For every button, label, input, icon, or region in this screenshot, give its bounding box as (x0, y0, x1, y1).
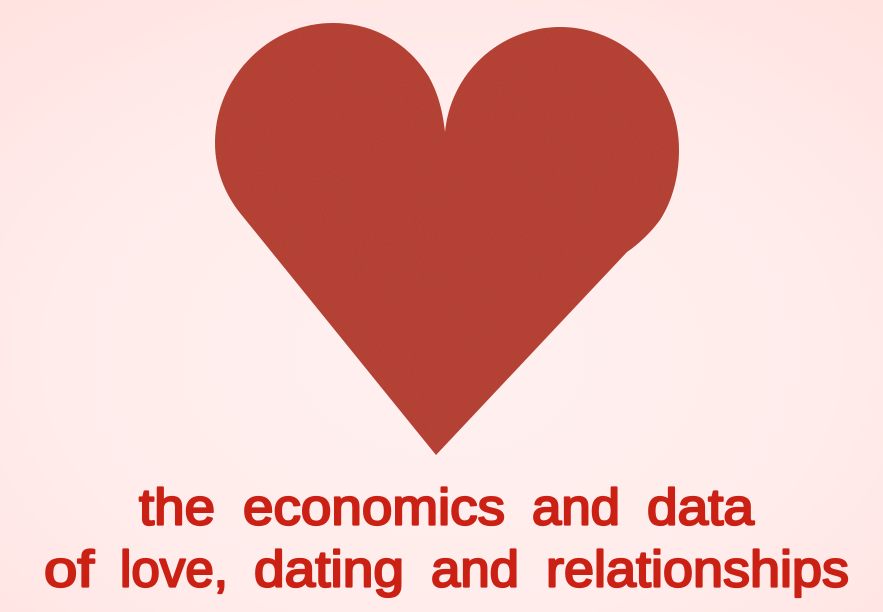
title line 2: of (44, 540, 95, 598)
title line 1: data (647, 478, 755, 536)
title line 1: the (139, 478, 215, 536)
icon: red paper heart (215, 23, 679, 455)
title line 1: and (532, 478, 620, 536)
title line 2: love, (120, 540, 228, 598)
title (44, 478, 849, 598)
title line 2: and (431, 540, 519, 598)
title line 2: relationships (546, 540, 849, 598)
title line 1: economics (243, 478, 505, 536)
title line 1 (139, 478, 755, 536)
title line 2: dating (254, 540, 404, 598)
title line 2 (44, 540, 849, 598)
